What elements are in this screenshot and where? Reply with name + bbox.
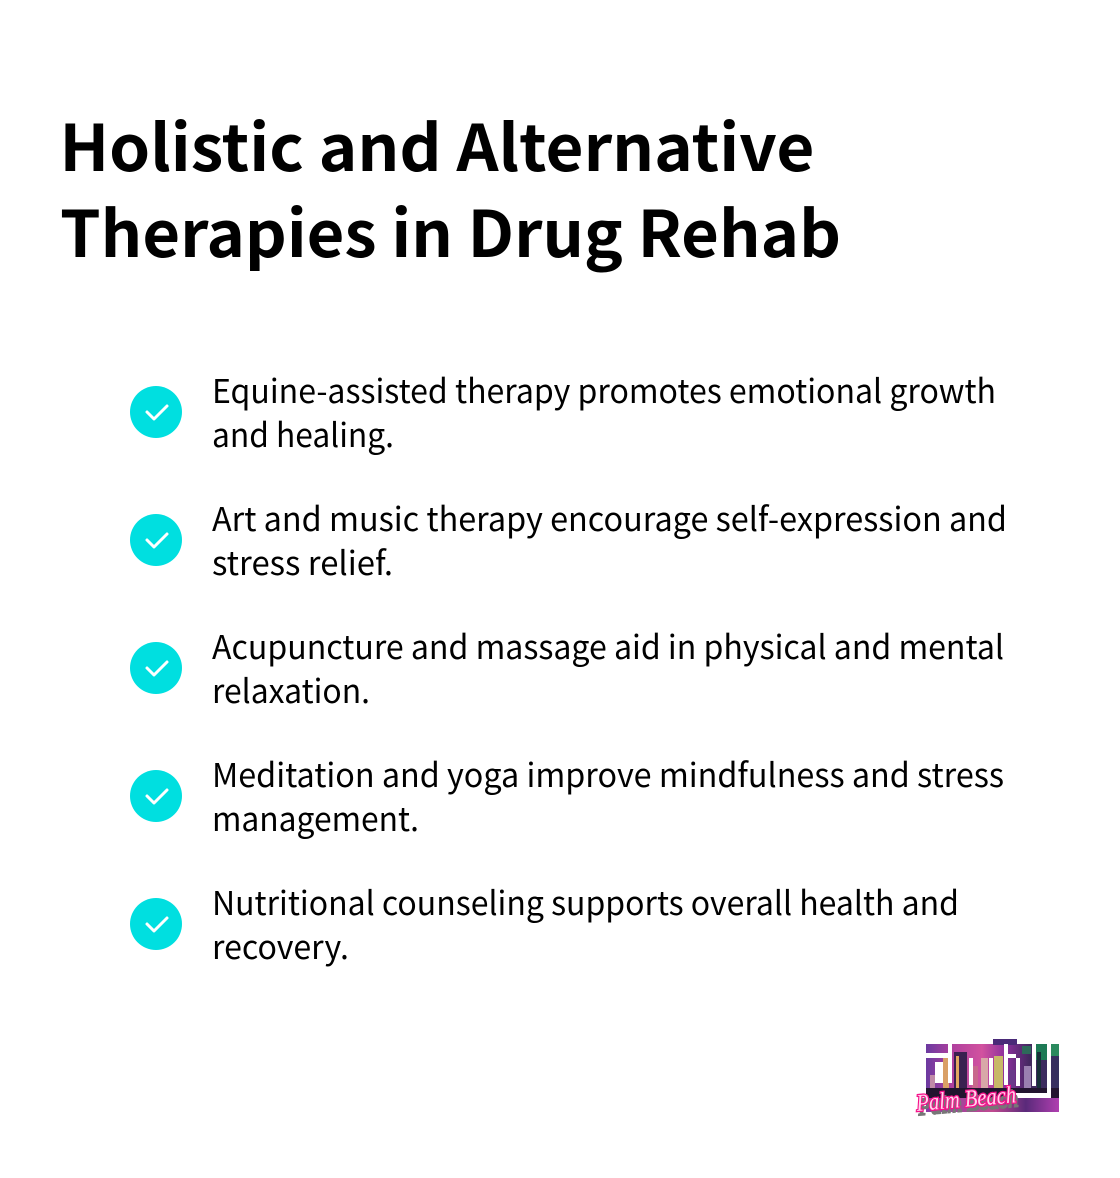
- title: [60, 98, 841, 276]
- icon: check mark: [130, 770, 182, 822]
- item text: management.: [212, 793, 419, 841]
- item text: [212, 749, 1004, 841]
- list item: equine-assisted therapy: [130, 365, 996, 457]
- item text: [212, 493, 1007, 585]
- list item: acupuncture and massage: [130, 621, 1004, 713]
- item text: [212, 877, 959, 969]
- logo: amitay Palm Beach: Palm Beach: [914, 1082, 1017, 1117]
- item text: [212, 621, 1004, 713]
- logo: amitay Palm Beach: [914, 1039, 1059, 1121]
- item text: relaxation.: [212, 665, 370, 713]
- item text: Nutritional counseling supports overall health and: [212, 877, 959, 925]
- item text: stress relief.: [212, 537, 393, 585]
- title: Holistic and Alternative: [60, 98, 814, 190]
- title: Therapies in Drug Rehab: [60, 184, 841, 276]
- icon: check mark: [130, 386, 182, 438]
- icon: check mark: [130, 642, 182, 694]
- list item: meditation and yoga: [130, 749, 1004, 841]
- item text: Art and music therapy encourage self-expression and: [212, 493, 1007, 541]
- item text: [212, 365, 996, 457]
- icon: check mark: [130, 898, 182, 950]
- item text: recovery.: [212, 921, 349, 969]
- list item: art and music therapy: [130, 493, 1007, 585]
- logo: amitay Palm Beach: Palm Beach: [916, 1086, 1019, 1121]
- icon: check mark: [130, 514, 182, 566]
- checklist: [130, 365, 1007, 969]
- item text: Equine-assisted therapy promotes emotional growth: [212, 365, 996, 413]
- item text: and healing.: [212, 409, 394, 457]
- item text: Acupuncture and massage aid in physical and mental: [212, 621, 1004, 669]
- item text: Meditation and yoga improve mindfulness and stress: [212, 749, 1004, 797]
- list item: nutritional counseling: [130, 877, 959, 969]
